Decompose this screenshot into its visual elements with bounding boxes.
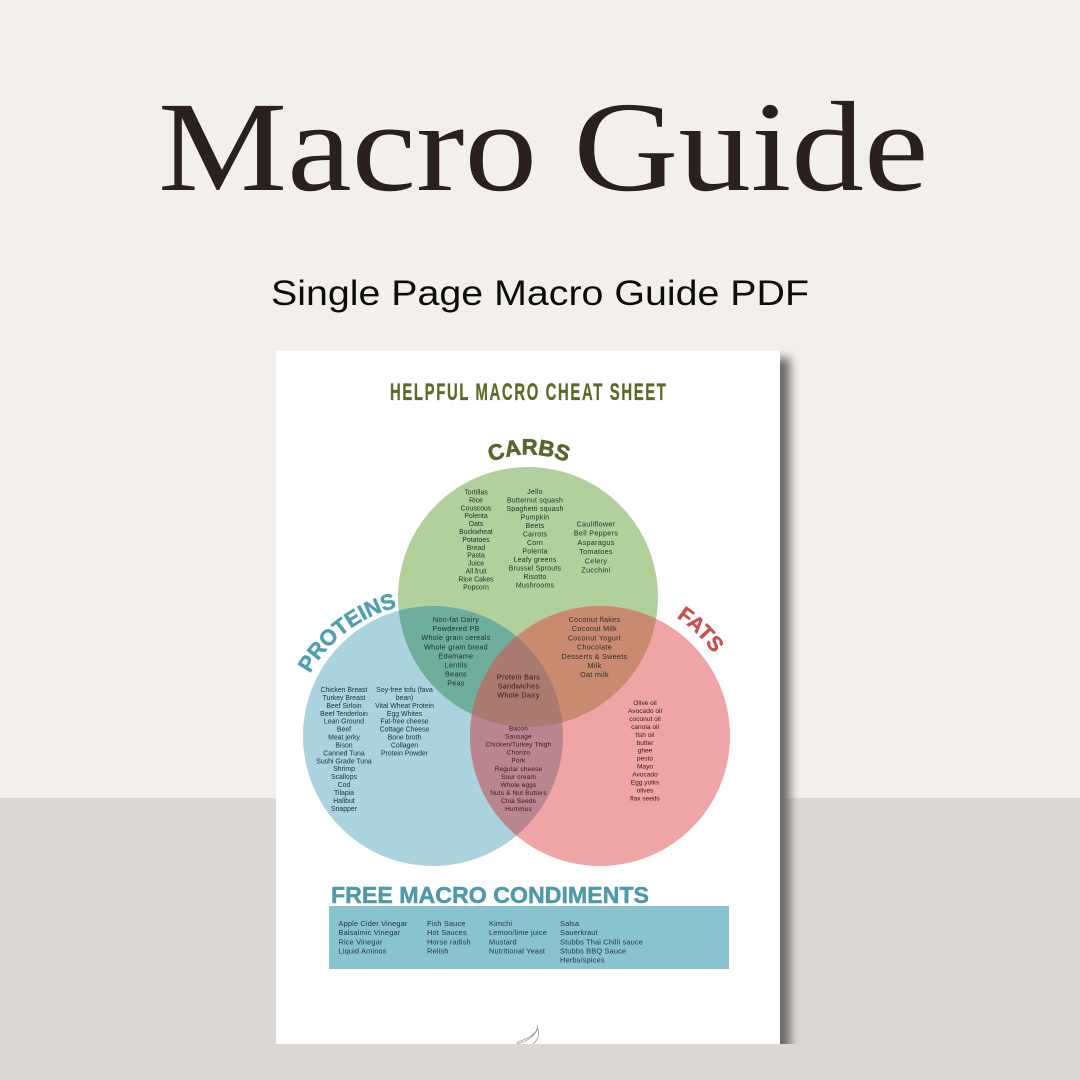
circle: carbs — [398, 467, 658, 727]
list: condiments column 1: Liquid Aminos — [338, 946, 387, 955]
list: carbs and fats: Oat milk — [580, 670, 609, 679]
list: proteins and fats: Bacon — [509, 726, 528, 732]
list: carbs column 1: Tortillas — [464, 490, 488, 496]
list: carbs and fats: Coconut Milk — [572, 624, 617, 633]
list: carbs column 1: Rice Cakes — [458, 576, 494, 583]
list: fats: Olive oil — [633, 700, 657, 707]
list: proteins column 1: Chicken Breast — [321, 687, 367, 694]
list: condiments column 4: Sauerkraut — [560, 928, 598, 937]
list: condiments column 3: Kimchi — [489, 919, 512, 928]
list: proteins and fats: Chorizo — [507, 750, 530, 757]
list: carbs column 3: Bell Peppers — [574, 529, 618, 538]
list: proteins and fats: Pork — [512, 758, 526, 765]
overlap: all three — [472, 636, 562, 727]
label: proteins: PROTEINS — [298, 594, 396, 673]
subtitle: Single Page Macro Guide PDF — [271, 274, 809, 313]
list: carbs column 1: Bread — [467, 545, 485, 552]
list: fats: ghee — [638, 748, 653, 755]
list: carbs and proteins: Lentils — [445, 660, 468, 670]
list: carbs and proteins: Whole grain cereals — [421, 633, 491, 642]
title: Macro Guide — [158, 76, 928, 218]
list: proteins column 1: Shrimp — [333, 766, 355, 773]
list: carbs column 3: Celery — [585, 556, 607, 565]
list: carbs and proteins: Beans — [445, 670, 467, 679]
list: proteins column 2: Protein Powder — [381, 750, 429, 757]
list: proteins column 1: Turkey Breast — [323, 695, 365, 702]
page shadow — [780, 350, 798, 1044]
list: carbs column 1: Juice — [468, 561, 484, 568]
list: fats: Mayo — [637, 764, 653, 771]
list: carbs column 2: Pumpkin — [521, 514, 549, 522]
list: carbs column 2: Risotto — [523, 574, 547, 581]
list: proteins and fats: Chia Seeds — [501, 798, 536, 805]
list: proteins column 2: Cottage Cheese — [380, 727, 430, 734]
list: fats: olives — [637, 787, 654, 794]
list: carbs column 2: Beets — [526, 523, 545, 530]
venn diagram — [298, 438, 730, 866]
list: condiments column 2: Horse radish — [427, 937, 471, 946]
list: carbs column 3: Cauliflower — [577, 520, 616, 528]
list: condiments column 1: Rice Vinegar — [338, 937, 383, 946]
list: proteins column 1: Tilapia — [334, 790, 354, 797]
list: condiments column 1: Balsalmic Vinegar — [338, 928, 401, 937]
list: carbs and fats: Coconut flakes — [569, 615, 620, 624]
list: carbs and fats: Coconut Yogurt — [568, 633, 621, 642]
list: fats: butter — [637, 740, 654, 747]
list: carbs and proteins: Peas — [447, 679, 465, 688]
list: carbs and proteins: Edamame — [439, 651, 473, 660]
list: fats: coconut oil — [629, 716, 661, 723]
label: fats: FATS — [677, 606, 723, 652]
list: proteins column 2: bean) — [396, 695, 413, 702]
list: carbs column 2: Spaghetti squash — [506, 506, 564, 513]
list: proteins and fats: Nuts & Nut Butters — [490, 790, 547, 797]
list: proteins column 1: Canned Tuna — [323, 750, 365, 757]
list: proteins column 2: Soy-free tofu (fava — [376, 687, 433, 694]
list: proteins column 2: Egg Whites — [387, 711, 423, 718]
list: proteins and fats: Hummus — [505, 806, 532, 813]
list: carbs column 2: Mushrooms — [516, 582, 554, 590]
list: fats: fish oil — [636, 732, 655, 739]
list: proteins column 1: Beef Tenderloin — [320, 711, 368, 718]
list: carbs column 2: Brussel Sprouts — [509, 566, 561, 572]
list: proteins column 2: Bone broth — [388, 735, 422, 742]
list: condiments column 3: Mustard — [489, 937, 517, 946]
list: all three macros: Whole Dairy — [497, 691, 540, 700]
list: carbs column 1: Polenta — [464, 513, 488, 520]
list: proteins column 1: Beef Sirloin — [326, 703, 362, 710]
list: carbs column 1: Popcorn — [463, 584, 489, 591]
list: condiments column 2: Relish — [427, 946, 448, 955]
icon: banana — [518, 1025, 539, 1044]
list: proteins column 1: Cod — [338, 782, 350, 789]
list: proteins and fats: Chicken/Turkey Thigh — [486, 742, 552, 749]
list: carbs column 1: Potatoes — [462, 537, 490, 544]
list: condiments column 3: Nutritional Yeast — [489, 946, 545, 955]
list: carbs column 1: All fruit — [465, 568, 487, 576]
list: carbs and proteins: Non-fat Dairy — [433, 615, 479, 624]
panel: cheat sheet page — [276, 351, 780, 1044]
list: condiments column 2: Fish Sauce — [427, 919, 466, 928]
list: proteins column 1: Meat jerky — [328, 735, 360, 742]
list: condiments column 4: Stubbs BBQ Sauce — [560, 946, 626, 955]
list: carbs and fats: Desserts & Sweets — [562, 652, 628, 661]
list: proteins and fats: Sour cream — [501, 774, 536, 781]
list: condiments column 2: Hot Sauces — [427, 928, 467, 937]
list: condiments column 3: Lemon/lime juice — [489, 928, 547, 937]
circle: proteins — [303, 606, 563, 866]
list: condiments column 4: Herbs/spices — [560, 956, 605, 965]
list: proteins column 2: Vital Wheat Protein — [375, 703, 434, 710]
circle: fats — [470, 606, 730, 866]
list: carbs column 2: Jello — [527, 489, 543, 496]
heading: helpful macro cheat sheet: HELPFUL MACRO CHEAT SHEET — [390, 380, 666, 406]
list: fats: canola oil — [631, 724, 659, 731]
list: proteins column 1: Lean Ground — [324, 719, 364, 726]
overlap: carbs and fats — [472, 606, 656, 722]
list: carbs column 2: Polenta — [522, 548, 548, 556]
list: fats: Avocado oil — [628, 708, 663, 715]
list: proteins and fats: Whole eggs — [501, 782, 536, 789]
list: carbs column 1: Pasta — [467, 553, 485, 560]
list: proteins column 2: Collagen — [391, 742, 418, 749]
list: carbs column 2: Leafy greens — [514, 557, 557, 564]
heading: free macro condiments: FREE MACRO CONDIMENTS — [331, 882, 649, 908]
list: fats: pesto — [637, 756, 653, 763]
list: condiments column 4: Salsa — [560, 919, 580, 928]
list: all three macros: Protein Bars — [497, 672, 540, 682]
list: carbs column 2: Carrots — [523, 532, 547, 538]
list: carbs column 1: Buckwheat — [459, 529, 493, 536]
list: carbs column 1: Oats — [469, 521, 484, 528]
list: carbs column 3: Tomatoes — [579, 547, 613, 556]
label: carbs: CARBS — [488, 438, 570, 461]
list: carbs column 3: Zucchini — [581, 566, 611, 574]
list: proteins column 1: Bison — [335, 742, 353, 749]
list: condiments column 1: Apple Cider Vinegar — [338, 919, 408, 928]
list: proteins column 1: Halibut — [333, 798, 355, 805]
list: carbs and proteins: Powdered PB — [432, 624, 480, 633]
list: proteins column 1: Beef — [337, 727, 351, 734]
overlap: carbs and proteins — [398, 606, 516, 714]
list: carbs column 3: Asparagus — [577, 538, 615, 547]
list: proteins column 1: Snapper — [331, 806, 358, 813]
list: fats: Avocado — [632, 772, 658, 779]
list: fats: Egg yolks — [631, 780, 660, 786]
list: carbs and fats: Milk — [588, 661, 602, 670]
list: carbs and proteins: Whole grain bread — [424, 642, 488, 651]
list: proteins column 2: Fat-free cheese — [380, 719, 429, 726]
list: carbs column 2: Butternut squash — [507, 498, 563, 504]
list: all three macros: Sandwiches — [498, 682, 539, 691]
list: carbs column 1: Couscous — [461, 505, 492, 512]
list: fats: flax seeds — [630, 795, 661, 802]
list: carbs column 2: Corn — [527, 540, 543, 547]
list: proteins column 1: Sushi Grade Tuna — [316, 758, 372, 765]
list: proteins and fats: Regular cheese — [495, 766, 543, 773]
panel: condiments box — [329, 906, 729, 969]
list: condiments column 4: Stubbs Thai Chilli sauce — [560, 937, 643, 946]
list: carbs column 1: Rice — [469, 497, 483, 504]
list: proteins and fats: Sausage — [505, 734, 532, 741]
list: carbs and fats: Chocolate — [577, 643, 612, 652]
list: proteins column 1: Scallops — [331, 774, 358, 781]
overlap: proteins and fats — [470, 638, 563, 836]
